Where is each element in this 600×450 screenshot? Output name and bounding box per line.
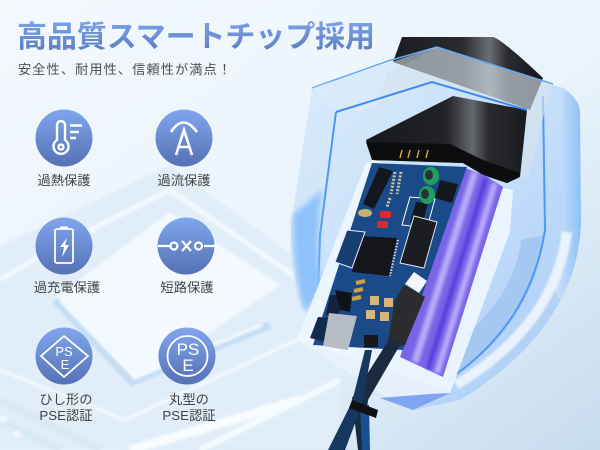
chip: top left: [363, 167, 393, 209]
title: 高品質スマートチップ採用: [17, 21, 375, 54]
green capacitors: [423, 167, 439, 185]
shield inner blue ring: [448, 96, 545, 380]
feature: diamond PSE: [36, 328, 93, 423]
chip: small pads: [387, 172, 401, 207]
shield back layer: [291, 47, 581, 410]
feature: round PSE: [158, 328, 216, 423]
icon: round PSE mark: [168, 336, 208, 376]
batteries: [400, 168, 503, 377]
label: 過流保護: [157, 173, 211, 188]
frosted shield band: [375, 47, 552, 178]
feature: overcurrent: [156, 110, 212, 188]
chip: SONY: [400, 216, 437, 268]
shield lower ring band: [447, 235, 545, 378]
chip: outlined upper center: [402, 197, 435, 228]
shield bottom tip: [297, 340, 450, 400]
label: 過熱保護: [37, 173, 91, 188]
cable: [328, 285, 425, 450]
connector tip: [405, 272, 427, 293]
icon: battery: [55, 226, 73, 263]
shield white outer glow rim: [456, 232, 567, 385]
label: ひし形の: [39, 392, 93, 407]
feature: round PSE: PSE認証: [162, 408, 216, 423]
feature: diamond PSE: PSE認証: [39, 408, 93, 423]
icon: diamond PSE mark: E: [61, 357, 70, 372]
USB-C port: [323, 313, 357, 350]
shield left saturated band: [293, 190, 322, 312]
chip: green capacitor neighbour: [435, 180, 458, 203]
feature: overheat: [36, 110, 92, 188]
dark chip left of USB: [310, 317, 332, 342]
red components: [380, 211, 391, 218]
outline: lower left: [335, 230, 365, 268]
charger: [366, 37, 543, 183]
crystal: [358, 209, 372, 217]
charger top block: [393, 37, 543, 110]
small dark parts: [326, 295, 345, 315]
circuit board: [310, 163, 467, 350]
icon: open switch: [158, 241, 214, 251]
circuit board background pattern: [0, 165, 340, 450]
charger plug pins: [400, 150, 428, 158]
icon: thermometer: [54, 121, 82, 154]
icon: round PSE mark: E: [182, 356, 194, 375]
feature: short circuit: [158, 218, 214, 295]
icon: A with arc: [171, 122, 197, 155]
icon: diamond PSE mark: PS: [55, 344, 73, 359]
small gold parts: [352, 281, 365, 299]
icon: round PSE mark: PS: [177, 340, 199, 359]
label: 過充電保護: [34, 280, 100, 295]
charger lower block: [366, 96, 527, 183]
icon: diamond PSE mark: [41, 336, 88, 377]
chip: main: [352, 236, 397, 276]
subtitle: 安全性、耐用性、信頼性が満点！: [18, 62, 231, 77]
charger lip: [366, 142, 520, 183]
transparent case: [297, 160, 513, 393]
label: 短路保護: [160, 280, 214, 295]
shield right edge band: [555, 88, 581, 300]
label: 丸型の: [169, 392, 209, 407]
feature: overcharge: [34, 218, 100, 295]
